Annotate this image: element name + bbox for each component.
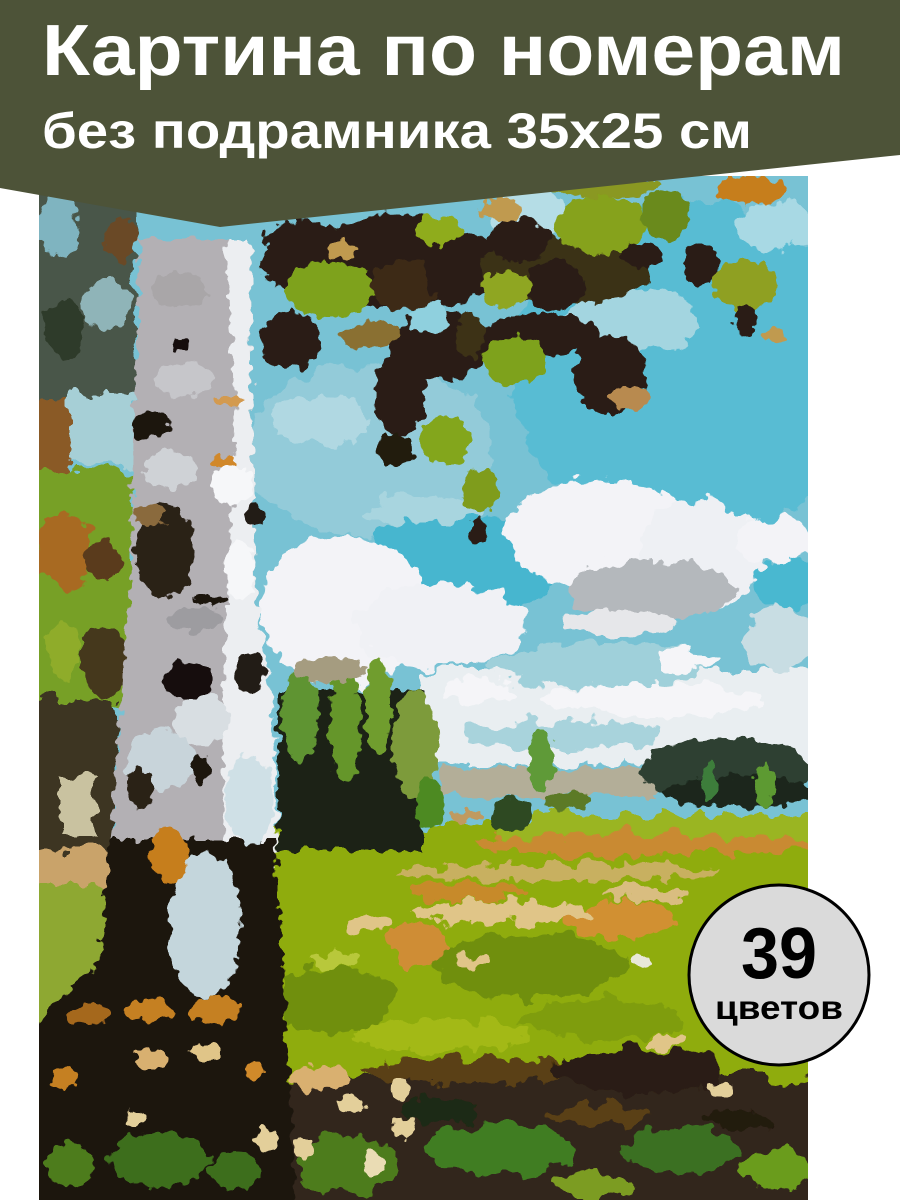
- painting: [39, 176, 808, 1200]
- tree canopy: [260, 173, 786, 544]
- bottom foreground: [260, 1048, 850, 1200]
- badge: 39 colours: цветов: [715, 989, 843, 1026]
- title: Картина по номерам: [42, 11, 845, 91]
- meadow: [39, 808, 808, 1085]
- badge: 39 colours: [689, 885, 869, 1065]
- subtitle: без подрамника 35х25 см: [42, 103, 752, 159]
- clouds: [260, 480, 840, 796]
- leaves and flowers foreground: [124, 1066, 733, 1174]
- badge: 39 colours: 39: [741, 914, 817, 994]
- header banner: [0, 0, 900, 227]
- sky: [68, 176, 808, 833]
- left edge foliage: [39, 195, 139, 890]
- distant forest: [278, 657, 815, 850]
- birch trunk: [39, 236, 298, 1200]
